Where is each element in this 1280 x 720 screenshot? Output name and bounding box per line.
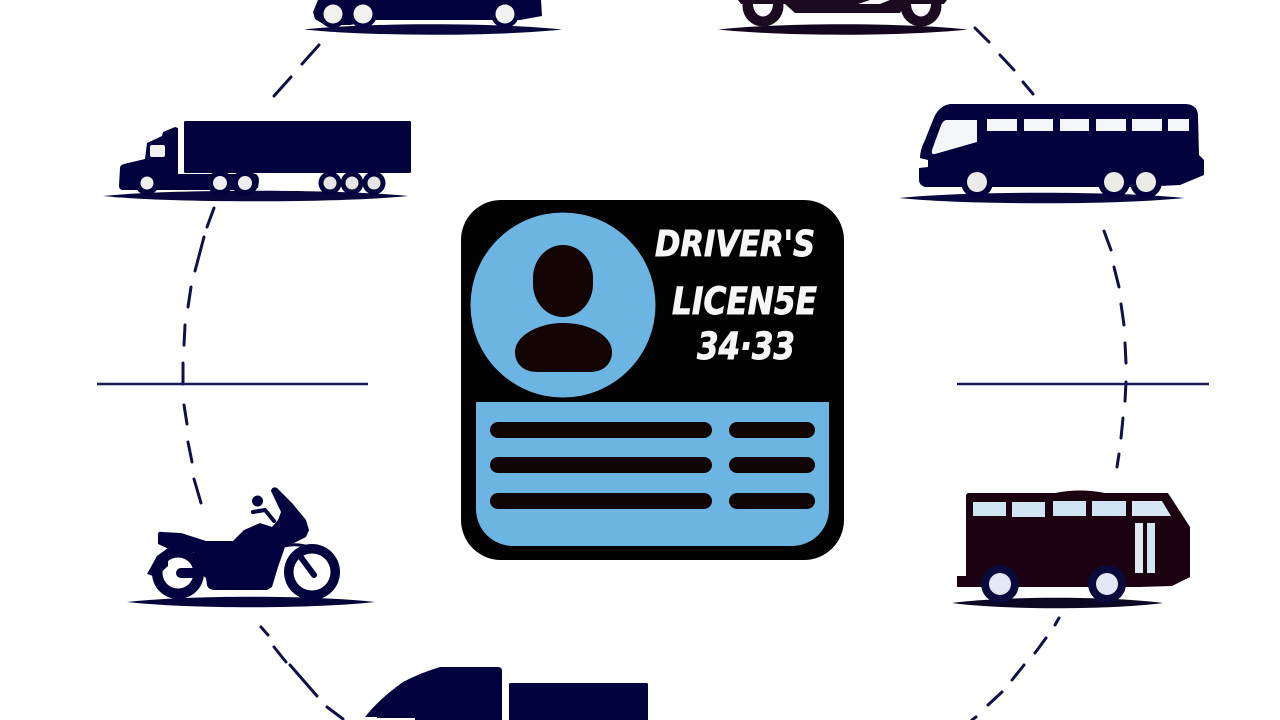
icon: car top left xyxy=(304,0,562,35)
card title: LICEN5E xyxy=(672,280,817,323)
card title xyxy=(655,224,817,368)
portrait shoulders xyxy=(515,323,612,372)
icon: motorcycle xyxy=(127,487,375,607)
icon: coach bus xyxy=(899,104,1204,203)
icon: minibus xyxy=(952,490,1190,608)
icon: truck bottom xyxy=(365,667,648,720)
detail lines xyxy=(490,422,815,509)
details panel xyxy=(476,402,829,546)
dashed ring connecting the vehicles xyxy=(183,28,1126,720)
portrait head xyxy=(533,245,593,317)
right horizontal rule xyxy=(957,383,1209,385)
left horizontal rule xyxy=(97,383,368,385)
card title: 34·33 xyxy=(697,325,795,368)
icon: car top right xyxy=(718,0,968,35)
photo circle xyxy=(470,212,656,398)
icon: semi truck xyxy=(103,121,411,201)
card title: DRIVER'S xyxy=(655,224,815,265)
card body xyxy=(461,200,844,560)
icon: driver's license card xyxy=(461,200,844,560)
